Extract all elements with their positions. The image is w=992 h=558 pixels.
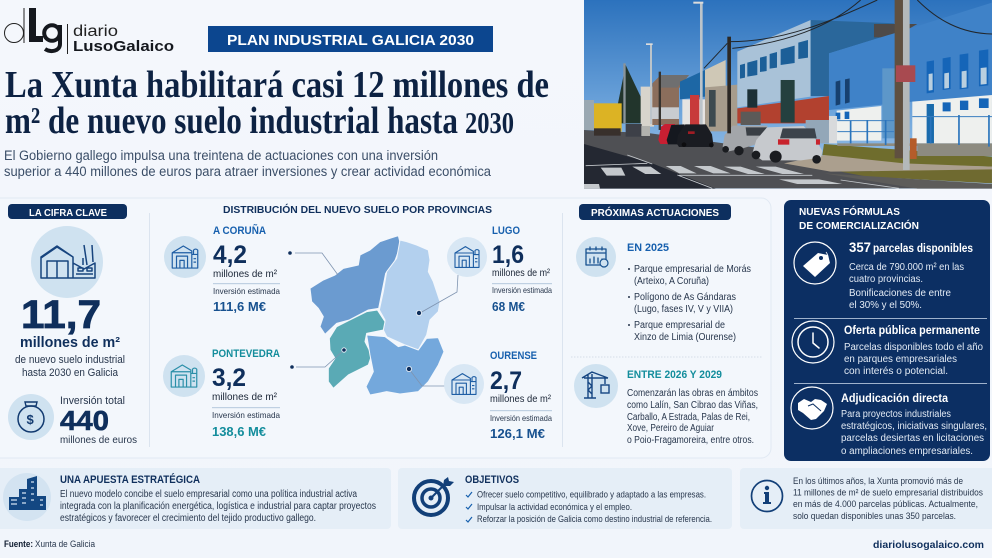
block: en 2025: Parque empresarial de [634,320,725,331]
province: Ourense [366,335,444,395]
province: Ourense: 126,1 M€ [490,426,545,441]
panel: nota informativa [740,468,992,529]
icon: building [447,237,487,277]
province: Lugo [447,225,552,314]
text: nota [793,476,983,522]
block: entre 2026 y 2029: como Lalín, San Cibrao das Viñas, [627,400,758,411]
province: Lugo: 1,6 [492,241,524,269]
callout dots [288,251,422,372]
block: oferta pública [844,325,983,377]
province: Lugo: millones de m² [492,268,551,279]
icon: price tag [794,242,836,284]
province: Ourense: OURENSE [490,350,537,362]
block: entre 2026 y 2029: o Poio-Fragamoreira, entre otros. [627,435,754,446]
province: A Coruña: A CORUÑA [213,224,266,237]
block: entre 2026 y 2029: Xove, Pereiro de Aguiar [627,423,715,434]
province: Lugo: Inversión estimada [492,285,552,295]
title: 2030 [465,105,514,140]
description: nuevo suelo: hasta 2030 en Galicia [22,367,118,379]
heading: nuevas fórmulas: DE COMERCIALIZACIÓN [799,219,919,232]
province: A Coruña: millones de m² [213,269,278,280]
icon: money bag: $ [26,412,34,427]
text: apuesta estratégica: integrada con la planificación energética, logística e industrial para captar proyectos [60,501,376,512]
province: Pontevedra: 138,6 M€ [212,424,266,439]
icon: info [752,480,782,512]
province: Lugo: LUGO [492,225,520,237]
block: adjudicación directa: o ampliaciones empresariales. [841,446,973,457]
block: en 2025: Parque empresarial de Morás [634,264,751,275]
subtitle [4,148,491,179]
total investment: Inversión total [60,395,125,407]
logo: diario LusoGalaico: LusoGalaico [73,38,174,55]
province: Ourense: 2,7 [490,367,522,395]
icon: factory [31,226,103,298]
total investment [60,395,137,446]
province: Ourense: millones de m² [490,394,552,405]
block: en 2025: (Lugo, fases IV, V y VIIA) [634,304,733,315]
heading: nuevas fórmulas [799,205,919,232]
block: 357 parcelas: el 30% y el 50%. [849,300,922,311]
block: en 2025 [627,242,751,343]
title: m² de nuevo suelo industrial hasta [5,100,458,142]
source: Xunta de Galicia [35,539,95,549]
logo: diario LusoGalaico [4,8,174,55]
panel: main card [0,198,771,458]
block: en 2025: EN 2025 [627,242,669,254]
province: Pontevedra: PONTEVEDRA [212,348,280,360]
map of Galicia [310,236,444,395]
panel: nuevas fórmulas [784,200,990,461]
province: A Coruña [164,224,280,314]
heading: próximas actuaciones [579,204,731,220]
province: A Coruña: 111,6 M€ [213,299,266,314]
panel: la cifra clave [8,204,137,446]
block: entre 2026 y 2029 [627,369,758,446]
panel: objetivos [398,468,732,529]
title [5,64,549,142]
subtitle: superior a 440 millones de euros para atraer inversiones y crear actividad económica [4,164,491,179]
heading: distribución: DISTRIBUCIÓN DEL NUEVO SUELO POR PROVINCIAS [223,203,492,216]
block: en 2025: Xinzo de Limia (Ourense) [634,332,736,343]
block: oferta pública: Parcelas disponibles todo el año [844,342,983,353]
block: adjudicación directa: estratégicos, iniciativas singulares, [841,421,987,432]
province: A Coruña [310,236,401,334]
block: 357 parcelas: parcelas disponibles [873,243,973,255]
block: oferta pública: en parques empresariales [844,354,957,365]
block: en 2025: Polígono de As Gándaras [634,292,736,303]
icon: building [163,355,205,397]
icon: city buildings [3,473,51,521]
banner: plan industrial [208,26,493,52]
banner: plan industrial: PLAN INDUSTRIAL GALICIA 2030 [227,32,474,49]
text: apuesta estratégica: El nuevo modelo concibe el suelo empresarial como una política industrial activa [60,489,357,500]
block: 357 parcelas: Bonificaciones de entre [849,288,951,299]
text: objetivos: Impulsar la actividad económica y el empleo. [477,502,632,512]
province: Lugo [379,240,440,350]
text: nota: solo quedan disponibles unas 350 parcelas. [793,511,956,522]
description: nuevo suelo [15,354,125,379]
photo: industrial street [584,0,992,189]
text: apuesta estratégica: estratégicos y favorecer el crecimiento del tejido productivo gallego. [60,513,316,524]
icon: calendar [576,237,616,277]
block: en 2025: (Arteixo, A Coruña) [634,276,709,287]
province: A Coruña: 4,2 [213,241,247,269]
block: oferta pública: Oferta pública permanente [844,325,980,337]
text: objetivos: Reforzar la posición de Galicia como destino industrial de referencia. [477,514,712,524]
label: millones de m²: millones de m² [20,335,120,351]
block: oferta pública: con interés o potencial. [844,366,948,377]
province: Ourense: Inversión estimada [490,413,552,423]
text: apuesta estratégica: UNA APUESTA ESTRATÉGICA [60,473,200,486]
icon: building [444,364,484,404]
province: Pontevedra [163,348,280,439]
panel: una apuesta estratégica [0,468,391,529]
province: Pontevedra: 3,2 [212,364,246,392]
province: Lugo: 68 M€ [492,299,525,314]
title: La Xunta habilitará casi 12 millones de [5,64,549,106]
block: 357 parcelas [849,239,973,311]
province: A Coruña: Inversión estimada [213,286,280,296]
province: Pontevedra: millones de m² [212,392,278,403]
heading: la cifra clave: LA CIFRA CLAVE [29,208,107,219]
block: entre 2026 y 2029: Comenzarán las obras en ámbitos [627,388,758,399]
source: Fuente: [4,539,33,549]
text: objetivos [465,474,712,524]
subtitle: El Gobierno gallego impulsa una treintena de actuaciones con una inversión [4,148,438,163]
block: adjudicación directa: Para proyectos industriales [841,409,951,420]
block: adjudicación directa: parcelas desiertas en licitaciones [841,433,984,444]
province: Pontevedra: Inversión estimada [212,410,280,420]
block: entre 2026 y 2029: ENTRE 2026 Y 2029 [627,369,722,381]
block: 357 parcelas: 357 [849,239,871,255]
block: 357 parcelas: Cerca de 790.000 m² en las [849,262,964,273]
block: 357 parcelas: cuatro provincias. [849,274,923,285]
heading: la cifra clave [8,204,127,219]
block: adjudicación directa [841,393,987,457]
total investment: 440 [60,405,109,436]
text: objetivos: OBJETIVOS [465,474,519,486]
website: diariolusogalaico.com [873,539,984,551]
block: adjudicación directa: Adjudicación directa [841,393,949,405]
province: Ourense [444,350,552,441]
icon: clock [792,321,834,363]
icon: building [164,236,206,278]
block: entre 2026 y 2029: Carballo, A Estrada, Palas de Rei, [627,412,750,423]
text: apuesta estratégica [60,473,376,524]
callout lines [295,253,458,386]
text: nota: En los últimos años, la Xunta promovió más de [793,476,963,487]
key figure: 11,7: 11,7 [21,293,101,337]
panel: próximas actuaciones [571,204,763,446]
description: nuevo suelo: de nuevo suelo industrial [15,354,125,366]
icon: crane [574,364,618,408]
icon: money bag [8,394,54,440]
icon: handshake [791,387,833,429]
icon: target [414,477,454,515]
heading: próximas actuaciones: PRÓXIMAS ACTUACIONES [591,206,719,219]
text: objetivos: Ofrecer suelo competitivo, equilibrado y adaptado a las empresas. [477,490,706,500]
source [4,539,95,549]
heading: nuevas fórmulas: NUEVAS FÓRMULAS [799,205,900,218]
province: Pontevedra [328,310,385,388]
total investment: millones de euros [60,434,137,446]
logo: diario LusoGalaico: diario [73,23,118,40]
